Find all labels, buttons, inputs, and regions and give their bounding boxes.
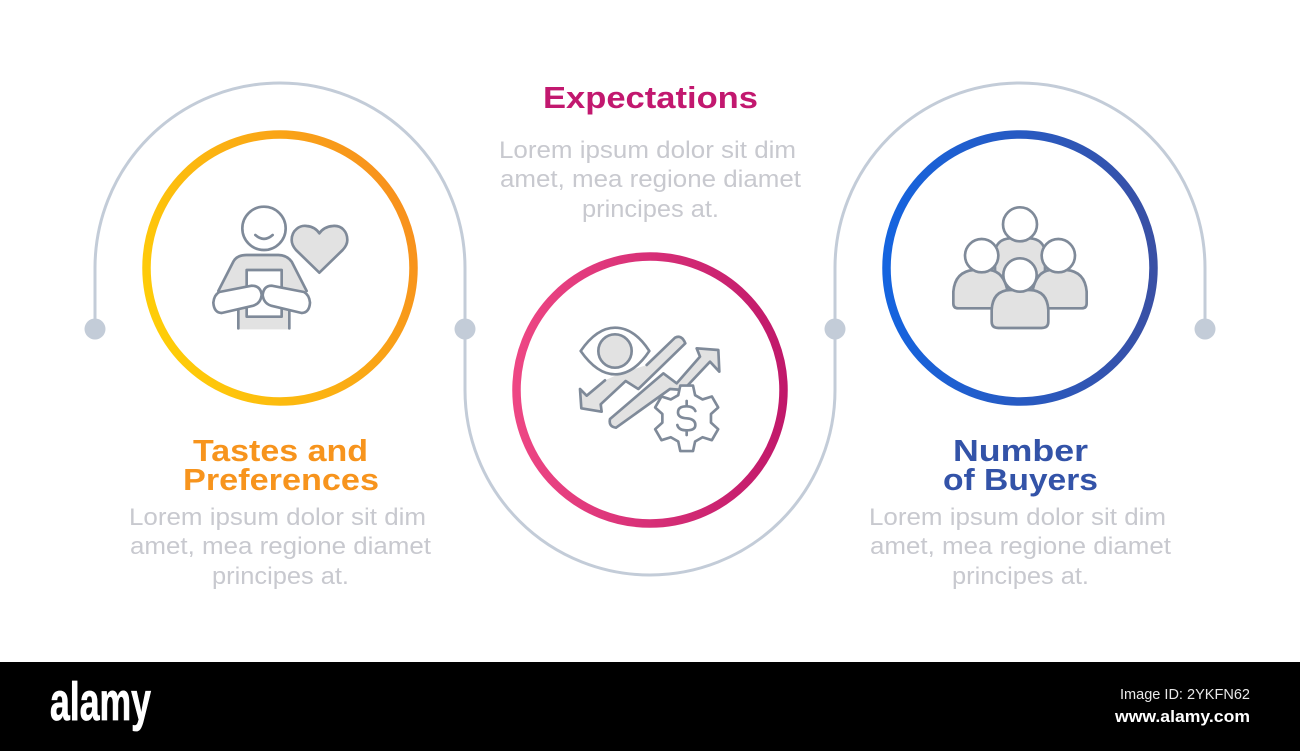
text block: tastes and preferences: Lorem ipsum dolor sit dim xyxy=(129,504,426,531)
text block: expectations: principes at. xyxy=(582,196,719,223)
text block: expectations: amet, mea regione diamet xyxy=(500,166,801,193)
ring: expectations xyxy=(516,256,784,524)
text block: tastes and preferences: principes at. xyxy=(212,563,349,590)
ring: number of buyers xyxy=(886,134,1154,402)
heading: expectations: Expectations xyxy=(543,80,758,115)
text block: number of buyers: amet, mea regione diamet xyxy=(870,533,1171,560)
icon: eye, trend arrows and dollar gear xyxy=(580,328,719,451)
text block: expectations: Lorem ipsum dolor sit dim xyxy=(499,137,796,164)
footer logo: alamy xyxy=(50,672,151,732)
icon: person holding paper with heart xyxy=(213,207,347,329)
text block: number of buyers: principes at. xyxy=(952,563,1089,590)
heading: number of buyers: Number xyxy=(953,433,1088,468)
text block: number of buyers: Lorem ipsum dolor sit dim xyxy=(869,504,1166,531)
heading: tastes and preferences: Preferences xyxy=(183,462,379,497)
ring: tastes and preferences xyxy=(146,134,414,402)
footer url: www.alamy.com xyxy=(1114,707,1250,726)
text block: tastes and preferences: amet, mea regione diamet xyxy=(130,533,431,560)
icon: group of people xyxy=(953,207,1087,328)
heading: tastes and preferences: Tastes and xyxy=(193,433,368,468)
footer image id: Image ID: 2YKFN62 xyxy=(1120,686,1250,703)
footer bar xyxy=(0,662,1300,751)
connector: wavy timeline xyxy=(84,83,1216,575)
heading: number of buyers: of Buyers xyxy=(943,462,1098,497)
